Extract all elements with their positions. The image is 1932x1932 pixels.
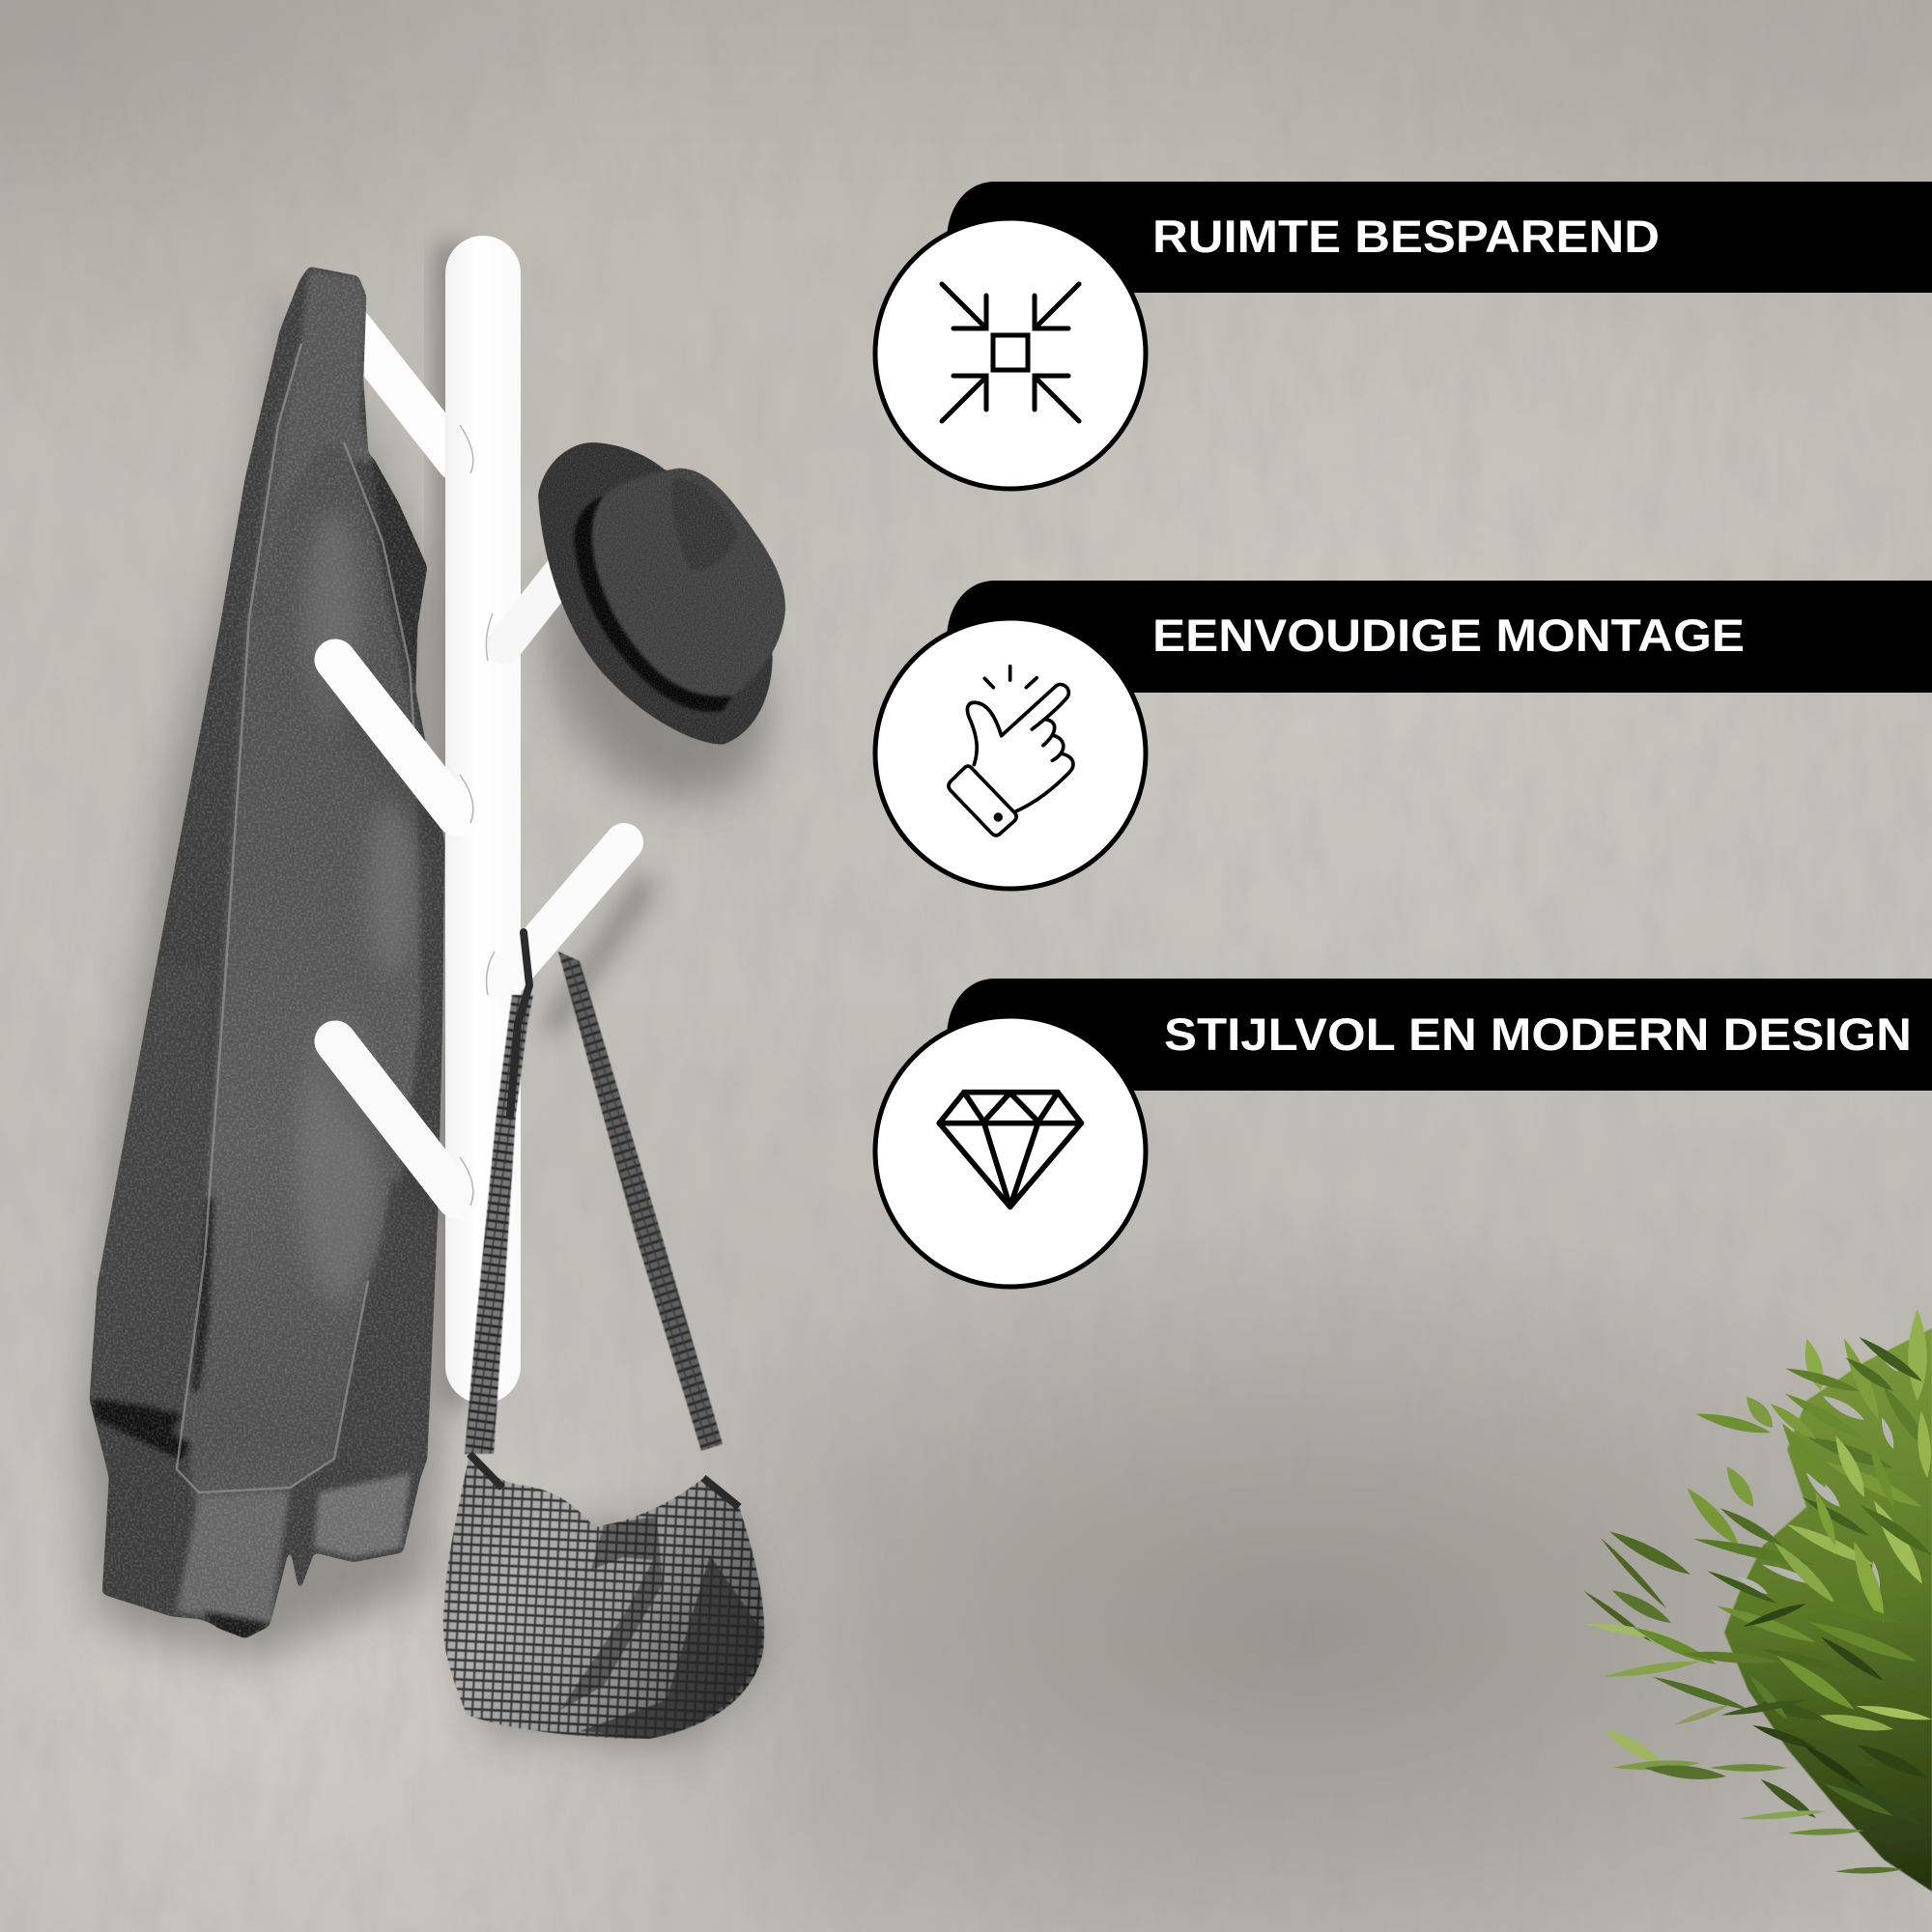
banner 3: stijlvol en modern design: [947, 979, 1932, 1091]
bag buckles: [469, 1454, 739, 1507]
coat fold lines: [176, 344, 415, 1492]
hat brim: [538, 442, 773, 744]
right strap: [558, 952, 723, 1451]
plant gaps showing wall: [1737, 1348, 1901, 1597]
peg joint outlines: [460, 425, 495, 1206]
coat slit: [191, 1198, 214, 1391]
peg shadows: [324, 676, 440, 1212]
hat crown shade: [672, 478, 738, 570]
banner bar: [947, 182, 1932, 293]
hook loop: [510, 932, 529, 1116]
peg 4 (right, under hat): [504, 562, 570, 645]
coat rack: peg behind coat: [353, 328, 457, 461]
peg 2 (left, middle): [335, 660, 457, 815]
coat dark sleeve opening: [93, 1399, 191, 1461]
circle icon: arrows pointing inward to square: [875, 218, 1146, 489]
bag shading: [443, 1454, 764, 1739]
bag flap fold: [560, 1517, 663, 1710]
bag: [443, 932, 764, 1739]
banner text: STIJLVOL EN MODERN DESIGN: [1164, 1009, 1912, 1060]
peg 3 (left, lower): [335, 1041, 457, 1198]
banner text: EENVOUDIGE MONTAGE: [1152, 610, 1745, 661]
circle icon: snapping fingers hand: [875, 618, 1146, 889]
plant mass: [1724, 1328, 1932, 1891]
coat hood: [259, 270, 371, 618]
plant: [1582, 1309, 1932, 1891]
bag bottom rim: [580, 1555, 763, 1739]
peg 5 (right, lower): [505, 842, 624, 980]
left strap: [465, 995, 533, 1454]
coat inner sleeve: [343, 1179, 435, 1488]
coat silhouette: [90, 267, 444, 1638]
plant leaves: [1582, 1309, 1932, 1875]
coat soft highlights: [298, 512, 416, 1304]
banner bar: [947, 979, 1932, 1091]
coat left cuff: [102, 1430, 193, 1611]
coat: [90, 267, 444, 1638]
banner 2: eenvoudige montage: [947, 581, 1932, 693]
hat crown: [582, 469, 785, 703]
coat front panel: [176, 345, 421, 1626]
banner 1: ruimte besparend: [947, 182, 1932, 293]
coat back fold: [371, 454, 427, 690]
hat: [538, 442, 785, 744]
banner bar: [947, 581, 1932, 693]
pole: [445, 236, 521, 1404]
coat front cuff: [179, 1492, 290, 1623]
circle icon: diamond: [875, 1016, 1146, 1287]
banner text: RUIMTE BESPAREND: [1152, 211, 1660, 262]
bag plaid fabric: [443, 1454, 764, 1739]
coat cuff shadow: [203, 1611, 270, 1638]
shadows on wall: [82, 242, 813, 1748]
coat rack: [324, 236, 624, 1404]
coat left sleeve: [90, 966, 208, 1449]
coat lower light cuff: [314, 1473, 411, 1557]
hat band: [574, 496, 732, 712]
